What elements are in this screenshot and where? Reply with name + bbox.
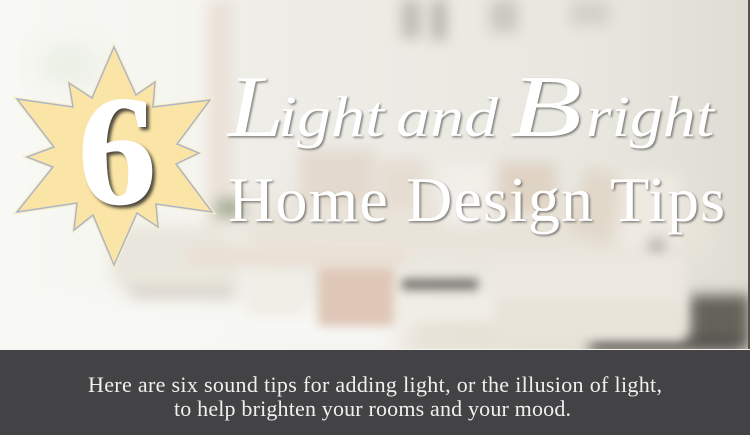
number 6: 6 [78, 64, 156, 237]
title line: Light and Bright [226, 59, 716, 156]
title line: Light and Bright: L [226, 59, 284, 156]
footer band [0, 349, 750, 435]
starburst badge with number 6 [12, 42, 216, 270]
footer intro text [88, 372, 662, 421]
star inner outline [17, 47, 212, 265]
footer intro text: to help brighten your rooms and your mood. [174, 396, 571, 421]
star shape [17, 47, 212, 265]
footer intro text: Here are six sound tips for adding light, or the illusion of light, [88, 372, 662, 397]
title line: Home Design Tips: Home Design Tips [228, 164, 725, 235]
title line: Light and Bright: right [586, 84, 716, 149]
title line: Light and Bright: B [510, 59, 582, 156]
title line: Light and Bright: ight [278, 84, 386, 149]
title line: Light and Bright: and [396, 87, 499, 149]
